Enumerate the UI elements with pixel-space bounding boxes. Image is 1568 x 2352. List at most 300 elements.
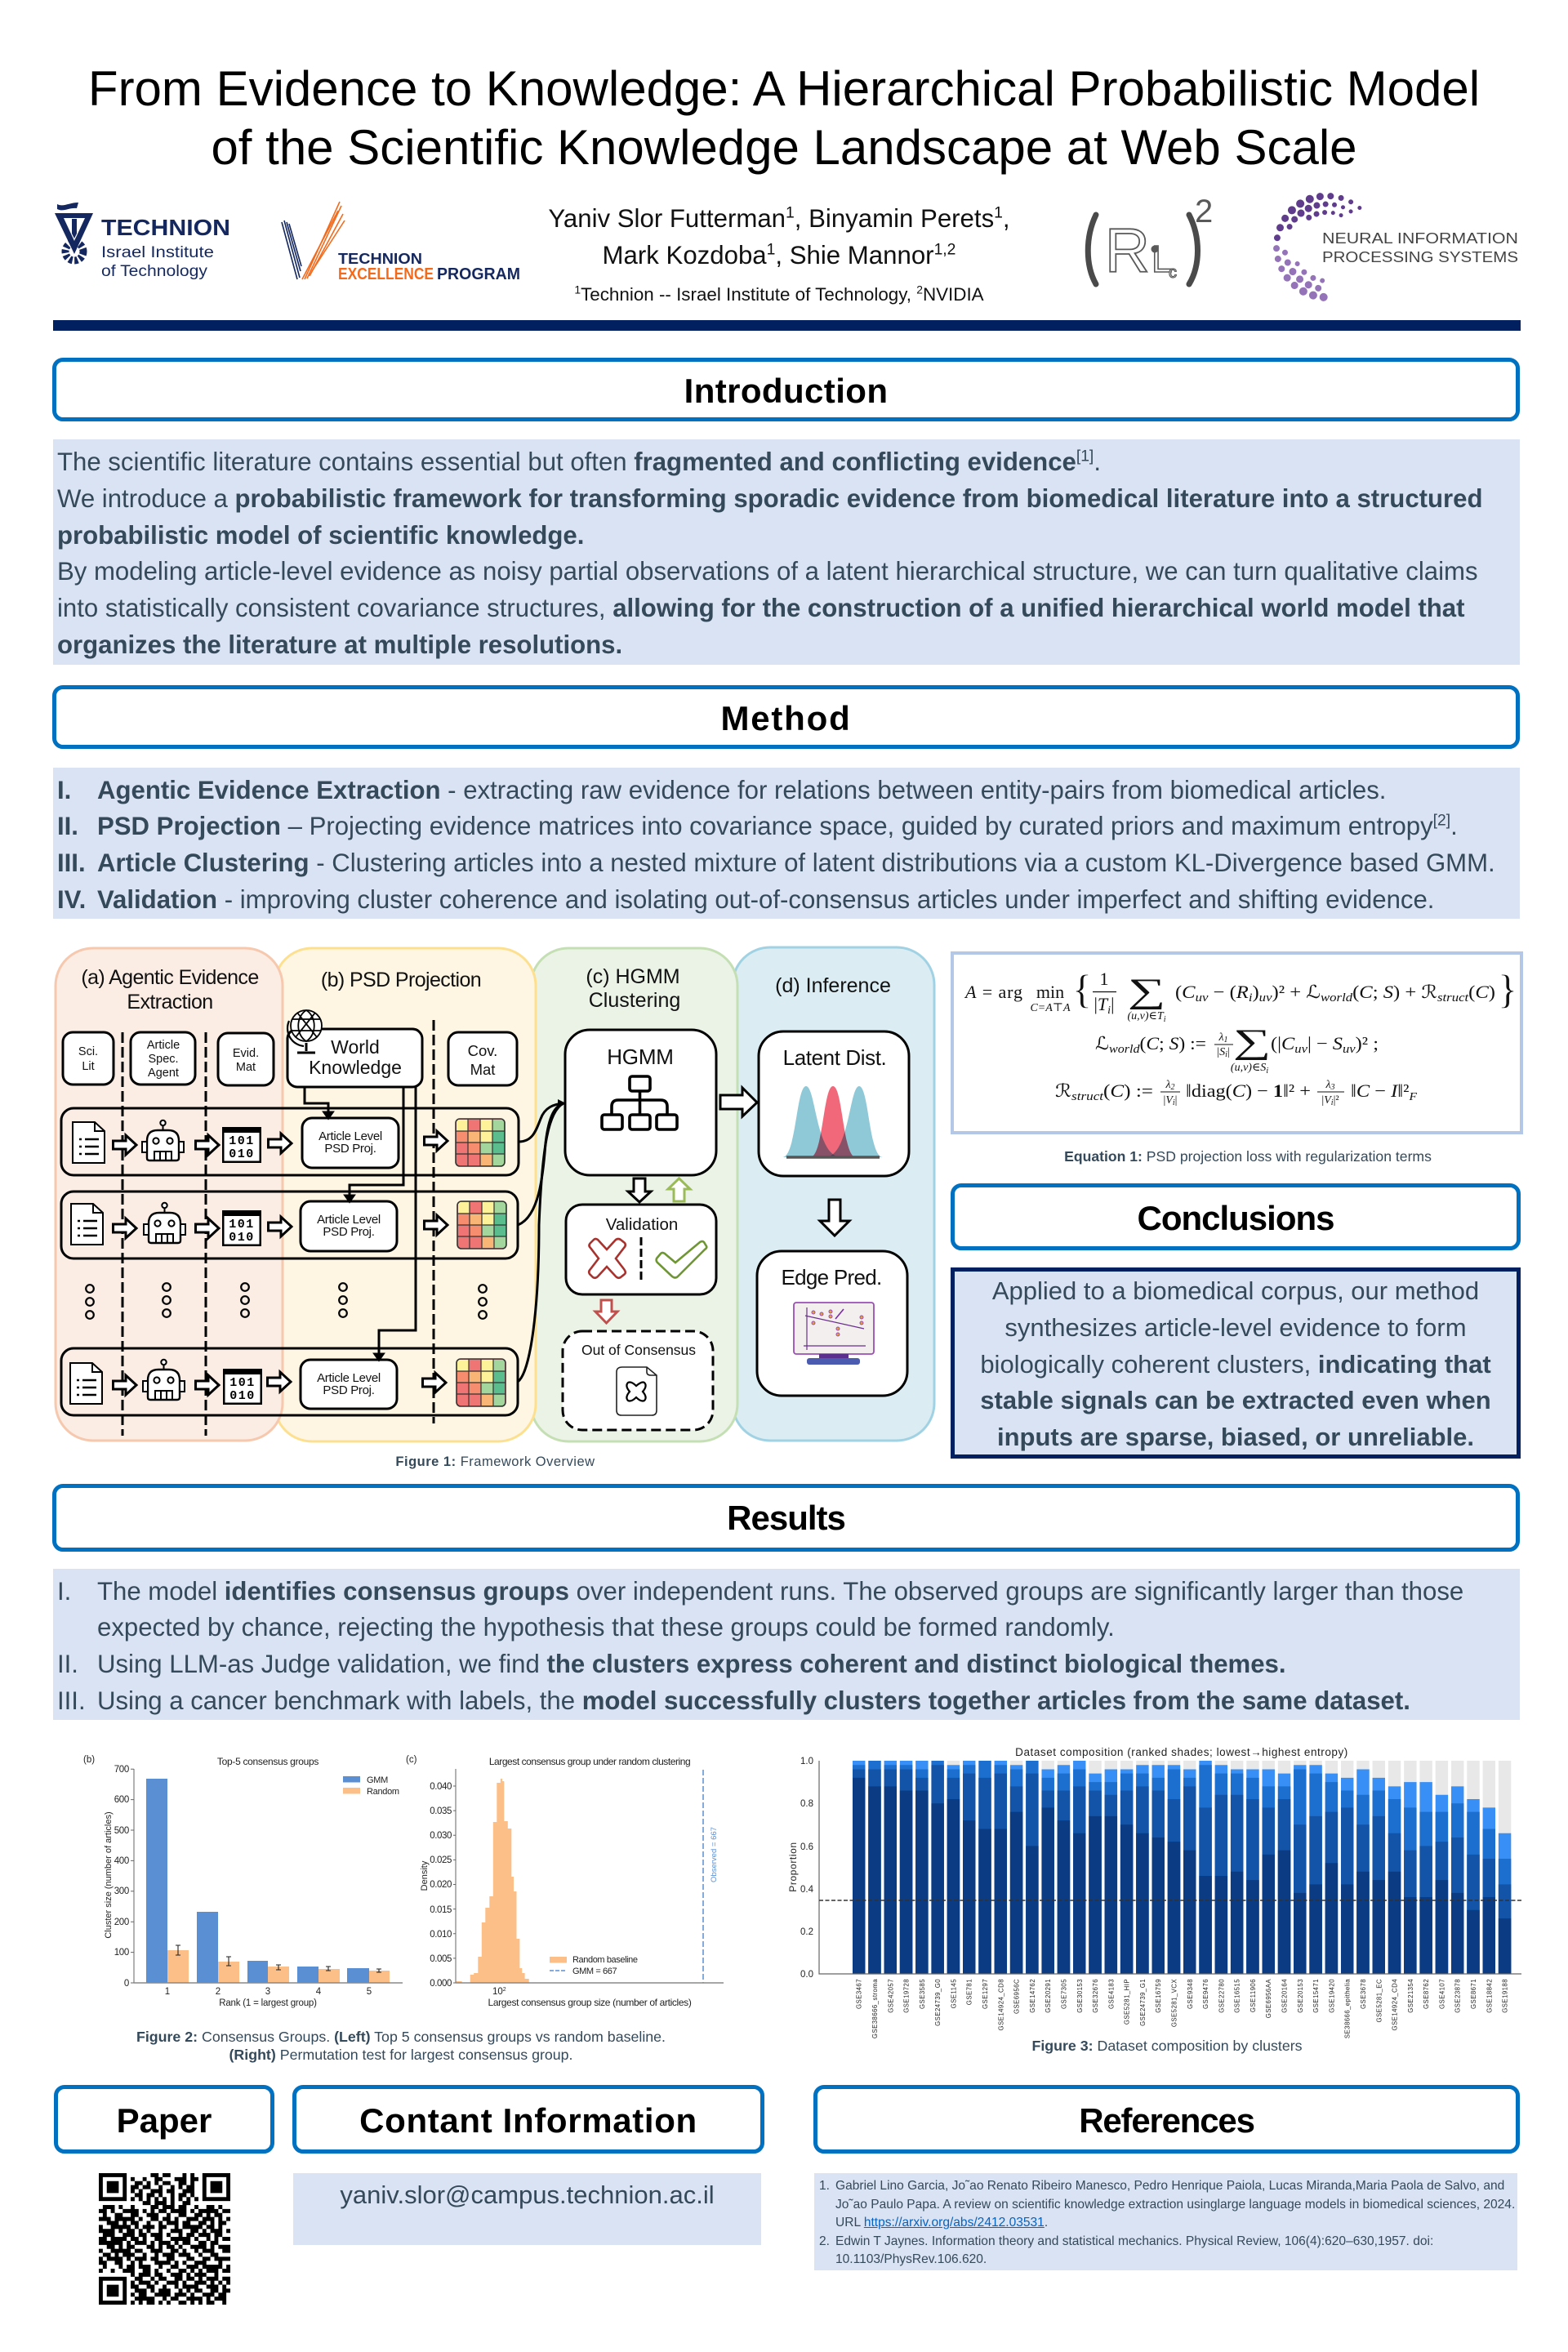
panel: method steps: Validation - improving cluster coherence and isolating out-of-consensus articles under imperfect and shifting evidence. [97,885,1434,914]
chart: dataset composition stacked bars: GSE7305 [1060,1979,1068,2009]
row 3: article pipeline [61,1348,518,1415]
equation line 1: (C [1175,982,1194,1002]
equation line 1: } [1498,966,1517,1012]
chart: dataset composition stacked bars: GSE20153 [1297,1979,1304,2013]
arrows: covariance matrices to HGMM [518,1099,566,1382]
chart: dataset composition stacked bars: GSE3467 [856,1979,863,2009]
chart: top-5 consensus groups bar chart: 5 [367,1987,372,1997]
box: Sci. Lit: Sci. [78,1045,98,1058]
chart: top-5 consensus groups bar chart: 1 [165,1987,170,1997]
panel: method steps: Agentic Evidence Extraction - extracting raw evidence for relations between entity-pairs from biomedical articles. [97,776,1386,804]
chart: largest consensus group histogram: 0.005 [430,1954,452,1964]
equation line 1: − ( [1208,982,1236,1002]
equation line 1: ( [1468,982,1475,1002]
authors: Yaniv Slor Futterman1, Binyamin Perets1, [548,204,1010,233]
caption: equation 1: Equation 1: PSD projection loss with regularization terms [1064,1148,1432,1165]
figure 1: framework overview diagram [54,946,936,1442]
box: out of consensus: Out of Consensus [581,1342,696,1358]
chart: dataset composition stacked bars: GSE30153 [1076,1979,1084,2013]
heading: panel a: (a) Agentic Evidence [81,966,259,989]
logo: RLC squared lab: L [1152,238,1173,280]
arrow: validation to out of consensus [595,1300,617,1323]
equation line 3: i [1331,1098,1334,1107]
chart: largest consensus group histogram: 0.040 [430,1782,452,1792]
title [88,61,1480,175]
panel: contact email: yaniv.slor@campus.technion.ac.il [340,2180,715,2209]
caption: figure 2 [136,2029,666,2063]
equation line 1: struct [1437,991,1469,1004]
arrow: HGMM to latent distribution [720,1088,757,1116]
panel: method steps: PSD Projection – Projecting evidence matrices into covariance space, guided by curated priors and maximum entropy[2]. [97,812,1458,840]
equation line 2: ∑ [1233,1022,1271,1060]
chart: dataset composition stacked bars: GSE19188 [1502,1979,1509,2013]
equation line 1: { [1072,966,1092,1012]
heading: Results: Results [727,1498,845,1537]
box: World Knowledge [287,1029,422,1087]
chart: largest consensus group histogram: 0.000 [430,1979,452,1989]
equation line 2: |S [1217,1046,1225,1058]
box: Cov. Mat: Cov. [468,1042,497,1059]
equation line 1: i [1164,1015,1166,1024]
logo: Neural Information Processing Systems: PROCESSING SYSTEMS [1322,248,1518,265]
chart: dataset composition stacked bars: GSE6956AA [1265,1979,1272,2018]
affiliations: 1Technion -- Israel Institute of Technology, 2NVIDIA [574,283,984,305]
logo: RLC squared lab: R [1105,216,1150,286]
panel: results text: expected by chance, rejecting the hypothesis that these groups could be formed randomly. [97,1613,1115,1642]
heading: References [813,2085,1520,2154]
chart: dataset composition stacked bars: GSE14762 [1029,1979,1036,2013]
chart: dataset composition stacked bars: GSE19728 [903,1979,911,2013]
heading: panel d: (d) Inference [775,974,891,997]
equation line 3: 2 [1171,1083,1175,1092]
chart: dataset composition stacked bars: GSE4107 [1438,1979,1446,2009]
equation line 1: A = arg [964,982,1022,1002]
equation line 1: (u,v)∈T [1128,1010,1164,1022]
chart: top-5 consensus groups bar chart: Cluster size (number of articles) [104,1811,114,1939]
panel: (a) agentic evidence extraction background [56,948,283,1441]
heading: Conclusions: Conclusions [1137,1199,1334,1236]
logo: Technion: of Technology [101,263,208,280]
box: Evid. Mat [218,1033,274,1085]
equation line 1: i [1107,1004,1111,1017]
chart: largest consensus group histogram: Random baseline [572,1955,638,1965]
equation line 2 [1095,1022,1379,1076]
panel: (c) HGMM clustering background [531,948,737,1441]
logo: RLC squared lab: c [1169,264,1177,282]
chart: top-5 consensus groups bar chart: (b) [83,1755,95,1765]
row 1: article pipeline: 101 [229,1134,255,1148]
equation line 3: i [1173,1098,1175,1107]
equation line 3: ( [1103,1080,1110,1101]
chart: top-5 consensus groups bar chart: Random [367,1787,399,1797]
heading: Introduction: Introduction [684,371,888,410]
panel: results text: The model identifies consensus groups over independent runs. The observed groups are significantly larger than those [97,1576,1463,1606]
equation line 3: C) := [1110,1080,1150,1101]
equation line 3: |V [1164,1094,1173,1107]
row 3: article pipeline: 101 [229,1376,256,1390]
logo: RLC squared lab: 2 [1195,194,1213,229]
logo: Technion: Israel Institute [101,244,214,261]
chart: largest consensus group histogram: (c) [406,1755,417,1765]
heading: Conclusions [951,1183,1521,1250]
panel: references list: Gabriel Lino Garcia, Jo˜ao Renato Ribeiro Manesco, Pedro Henrique Paiola, Lucas Miranda,Maria Paola de Salvo, and [835,2179,1504,2193]
equation line 1: uv [1259,991,1272,1004]
chart: dataset composition stacked bars [787,1746,1521,2039]
chart: largest consensus group histogram: 10 [492,1987,503,1997]
chart: dataset composition stacked bars: GSE24739_G0 [934,1979,942,2026]
panel: results text: III. [57,1686,86,1715]
equation line 2: i [1266,1067,1268,1076]
logo: Technion Excellence Program: EXCELLENCE [338,265,434,283]
equation line 2: i [1225,1050,1227,1059]
panel: introduction text: We introduce a probabilistic framework for transforming sporadic evidence from biomedical literature into a structured [57,484,1483,513]
equation line 1: C=A⊤A [1030,1002,1071,1014]
equation line 1: R [1236,982,1249,1002]
chart: top-5 consensus groups bar chart: 4 [316,1987,322,1997]
heading: panel b: (b) PSD Projection [321,969,481,991]
chart: largest consensus group histogram: 0.020 [430,1880,452,1890]
equation line 3: |² [1334,1094,1339,1107]
equation line 3: λ [1165,1079,1171,1091]
chart: dataset composition stacked bars: GSE3678 [1360,1979,1367,2009]
heading: Method: Method [720,699,852,737]
equation line 3: 3 [1330,1083,1335,1092]
panel: conclusions text: stable signals can be extracted even when [980,1386,1491,1414]
panel: method steps: III. [57,849,86,877]
dashed column dividers [122,1020,434,1436]
equation line 2: C; S) := [1146,1033,1205,1054]
chart: dataset composition stacked bars: 0.2 [800,1927,813,1937]
chart: top-5 consensus groups bar chart: 200 [114,1918,129,1927]
chart: dataset composition stacked bars: GSE16759 [1155,1979,1162,2013]
equation line 1 [964,966,1517,1024]
row 2: article pipeline: 101 [229,1218,255,1232]
equation line 1: 1 [1099,969,1109,989]
panel: references list: Edwin T Jaynes. Information theory and statistical mechanics. Physical Review, 106(4):620–630,1957. doi: [835,2234,1433,2247]
heading: Paper: Paper [117,2100,212,2140]
panel: references list: 1. [819,2179,830,2193]
equation line 3: ℛ [1055,1080,1070,1101]
equation line 2: | [1227,1046,1230,1058]
chart: top-5 consensus groups bar chart [83,1755,403,2008]
chart: dataset composition stacked bars: GSE22780 [1218,1979,1225,2013]
heading: References: References [1079,2100,1254,2140]
icon: QR code [99,2173,230,2305]
arrows: world knowledge to article level projections [305,1087,416,1360]
box: HGMM with hierarchy icon: HGMM [607,1045,674,1069]
chart: top-5 consensus groups bar chart: 2 [216,1987,220,1997]
chart: dataset composition stacked bars: GSE9348 [1187,1979,1194,2009]
panel: references list: URL https://arxiv.org/abs/2412.03531. [835,2216,1048,2230]
chart: largest consensus group histogram: Largest consensus group size (number of articles) [488,1997,692,2008]
logo: Technion [55,203,230,280]
heading: Paper [54,2085,274,2154]
panel: introduction text: into statistically consistent covariance structures, allowing for the construction of a unified hierarchical world model that [57,594,1465,622]
box: out of consensus [563,1331,713,1430]
chart: top-5 consensus groups bar chart: 500 [114,1826,129,1836]
chart: dataset composition stacked bars: GSE5281_HIP [1124,1979,1131,2025]
chart: largest consensus group histogram: Observed = 667 [710,1827,719,1882]
panel: conclusions text: inputs are sparse, biased, or unreliable. [997,1423,1474,1451]
box: edge prediction with monitor icon [757,1251,907,1396]
chart: largest consensus group histogram: 0.025 [430,1855,452,1865]
chart: dataset composition stacked bars: GSE4183 [1107,1979,1115,2009]
equation line 2: (|C [1271,1033,1294,1054]
panel: conclusions text [951,1267,1521,1459]
title: From Evidence to Knowledge: A Hierarchical Probabilistic Model [88,61,1480,116]
chart: top-5 consensus groups bar chart: 100 [114,1948,129,1958]
panel: method steps: I. [57,776,71,804]
chart: top-5 consensus groups bar chart: 300 [114,1886,129,1896]
heading: panel c: (c) HGMM [586,965,680,988]
logo: Technion Excellence Program: PROGRAM [437,265,520,283]
chart: largest consensus group histogram: 0.015 [430,1905,452,1915]
panel: results text: Using LLM-as Judge validation, we find the clusters express coherent and distinct biological themes. [97,1650,1286,1678]
chart: top-5 consensus groups bar chart: 600 [114,1795,129,1805]
row 3: article pipeline: Article Level [317,1371,381,1385]
chart: dataset composition stacked bars: GSE11906 [1250,1979,1257,2012]
panel: results text: II. [57,1650,78,1678]
panel: (b) PSD projection background [274,948,536,1441]
box: Article Spec. Agent [131,1032,195,1085]
arrow: latent distribution to edge prediction [820,1200,849,1236]
equation line 3: F [1408,1091,1417,1103]
box: Evid. Mat: Mat [236,1061,256,1074]
equation line 3: | [1175,1094,1177,1107]
equation line 1: C; S) + ℛ [1359,982,1432,1002]
chart: dataset composition stacked bars: GSE5281_VCX [1171,1979,1178,2027]
chart: dataset composition stacked bars: 0.4 [800,1885,814,1895]
chart: dataset composition stacked bars: GSE19420 [1328,1979,1335,2013]
chart: dataset composition stacked bars: GSE1297 [982,1979,989,2009]
equation line 1: world [1321,991,1353,1004]
chart: dataset composition stacked bars: GSE781 [966,1979,973,2005]
equation line 1: i [1249,991,1253,1004]
equation line 2: world [1109,1043,1140,1056]
equation line 2: ( [1140,1033,1146,1054]
logo: Technion: TECHNION [101,215,230,240]
chart: top-5 consensus groups bar chart: 0 [124,1979,129,1989]
chart: dataset composition stacked bars: 0.6 [800,1842,813,1852]
row 1: article pipeline: 010 [229,1147,255,1161]
panel: references list [814,2173,1517,2270]
row 2: article pipeline: PSD Proj. [323,1225,375,1239]
chart: dataset composition stacked bars: GSE42057 [887,1979,894,2013]
chart: largest consensus group histogram: GMM = 667 [572,1967,617,1976]
logo: Technion Excellence Program [281,201,520,283]
logo: Neural Information Processing Systems [1273,193,1518,301]
figure 1: framework overview diagram: Clustering [589,989,680,1012]
caption: figure 1: Figure 1: Framework Overview [395,1454,595,1469]
chart: dataset composition stacked bars: GSE20291 [1045,1979,1052,2013]
row 2: article pipeline [61,1192,518,1258]
equation line 3: λ [1325,1079,1331,1091]
chart: top-5 consensus groups bar chart: GMM [367,1775,388,1785]
chart: largest consensus group histogram [406,1755,724,2008]
chart: dataset composition stacked bars: GSE20164 [1281,1979,1289,2013]
row 1: article pipeline [61,1108,519,1175]
panel: conclusions text: synthesizes article-level evidence to form [1004,1313,1467,1342]
panel: references list: 2. [819,2234,830,2247]
chart: dataset composition stacked bars: GSE38666_stroma [871,1979,879,2038]
chart: dataset composition stacked bars: GSE1145 [950,1979,957,2008]
heading: Contact Information [292,2085,764,2154]
chart: dataset composition stacked bars: 0.8 [800,1799,813,1809]
chart: top-5 consensus groups bar chart: Rank (1 = largest group) [219,1998,317,2008]
chart: dataset composition stacked bars: GSE6956C [1013,1979,1021,2014]
caption: figure 2: (Right) Permutation test for largest consensus group. [229,2047,573,2063]
panel: method steps [53,768,1520,919]
panel: conclusions text: biologically coherent clusters, indicating that [980,1350,1491,1379]
chart: dataset composition stacked bars: 1.0 [800,1757,813,1766]
box: Sci. Lit [63,1032,114,1085]
chart: largest consensus group histogram: Density [420,1860,430,1891]
panel: results text: Using a cancer benchmark with labels, the model successfully clusters together articles from the same dataset. [97,1686,1410,1715]
chart: dataset composition stacked bars: GSE14924_CD8 [997,1979,1004,2030]
equation line 2: (u,v)∈S [1231,1062,1266,1074]
panel: results text: I. [57,1576,71,1606]
heading: Contact Information: Contant Information [359,2100,697,2140]
equation line 2: 1 [1224,1036,1228,1045]
equation line 3: ‖C − I‖² [1351,1080,1408,1101]
equation line 1: |T [1094,994,1107,1014]
equation line 2: ℒ [1095,1033,1108,1054]
panel: contact email [293,2173,761,2245]
logo: Neural Information Processing Systems: NEURAL INFORMATION [1322,229,1518,247]
panel: introduction text: By modeling article-level evidence as noisy partial observations of a latent hierarchical structure, we can turn qualitative claims [57,557,1478,586]
authors [548,204,1010,270]
logo: Technion Excellence Program: TECHNION [338,251,422,267]
equation line 1: | [1111,994,1114,1014]
panel: references list: 10.1103/PhysRev.106.620. [835,2252,987,2266]
chart: dataset composition stacked bars: GSE18842 [1486,1979,1493,2013]
ellipsis dots between rows [86,1283,487,1319]
chart: dataset composition stacked bars: GSE23878 [1454,1979,1462,2013]
equation line 1: ) [1253,982,1259,1002]
box: validation [566,1205,716,1294]
panel: conclusions text: Applied to a biomedical corpus, our method [992,1276,1479,1305]
chart: dataset composition stacked bars: GSE9476 [1202,1979,1209,2009]
box: edge prediction with monitor icon: Edge Pred. [781,1265,882,1290]
panel: results text [53,1569,1520,1720]
equation line 1: min [1036,982,1064,1002]
header divider bar [53,320,1521,331]
chart: top-5 consensus groups bar chart: 700 [114,1765,129,1775]
panel: (d) inference background [733,947,934,1441]
panel: introduction text: organizes the literature at multiple resolutions. [57,630,622,659]
equation line 1: uv [1196,991,1209,1004]
title: of the Scientific Knowledge Landscape at Web Scale [211,120,1357,175]
row 3: article pipeline: PSD Proj. [323,1383,375,1397]
panel: references list: Jo˜ao Paulo Papa. A review on scientific knowledge extraction usinglarge language models in biomedical sciences, 2024. [835,2197,1515,2212]
equation line 2: uv [1343,1043,1356,1056]
figure 1: framework overview diagram: Extraction [127,991,213,1013]
chart: dataset composition stacked bars: GSE24739_G1 [1139,1979,1147,2026]
box: Article Spec. Agent: Article [147,1039,180,1052]
chart: largest consensus group histogram: 0.030 [430,1831,452,1841]
heading: Introduction [52,358,1520,421]
row 1: article pipeline: Article Level [318,1129,382,1143]
row 2: article pipeline: Article Level [317,1213,381,1227]
authors: Mark Kozdoba1, Shie Mannor1,2 [603,241,956,270]
chart: dataset composition stacked bars: GSE21354 [1407,1979,1414,2013]
equation line 3: struct [1071,1090,1104,1103]
equation line 3 [1055,1079,1417,1107]
chart: dataset composition stacked bars: GSE32676 [1092,1979,1099,2013]
panel: equation 1 [951,951,1523,1134]
chart: dataset composition stacked bars: GSE14924_CD4 [1392,1979,1399,2030]
chart: dataset composition stacked bars: 0.0 [800,1970,813,1980]
panel: method steps: Article Clustering - Clustering articles into a nested mixture of latent distributions via a custom KL-Divergence based GMM. [97,849,1495,877]
equation line 1: )² + ℒ [1272,982,1321,1002]
icon: globe [287,1010,322,1053]
equation line 3: ‖diag(C) − 1‖² + [1186,1080,1311,1101]
row 1: article pipeline: PSD Proj. [324,1142,376,1156]
chart: largest consensus group histogram: 2 [503,1987,506,1993]
chart: dataset composition stacked bars: GSE16515 [1234,1979,1241,2013]
chart: largest consensus group histogram: 0.035 [430,1806,452,1816]
box: Article Spec. Agent: Agent [148,1067,179,1080]
box: validation: Validation [606,1215,678,1234]
chart: top-5 consensus groups bar chart: 400 [114,1856,129,1866]
chart: dataset composition stacked bars: Proportion [787,1842,799,1892]
box: Cov. Mat [448,1032,517,1085]
equation line 2: uv [1294,1043,1307,1056]
box: World Knowledge: World [331,1036,380,1058]
panel: introduction text: probabilistic model of scientific knowledge. [57,521,584,550]
chart: dataset composition stacked bars: GSE5281_EC [1375,1979,1383,2022]
equation line 1: C) [1475,982,1494,1002]
chart: dataset composition stacked bars: GSE15471 [1312,1979,1320,2013]
equation line 2: )² ; [1356,1033,1379,1054]
equation line 2: S [1333,1033,1343,1054]
chart: largest consensus group histogram: 0.010 [430,1930,452,1940]
caption: figure 2: Figure 2: Consensus Groups. (Left) Top 5 consensus groups vs random baseline. [136,2029,666,2045]
caption: figure 3: Figure 3: Dataset composition by clusters [1031,2038,1303,2054]
row 3: article pipeline: 010 [229,1389,256,1403]
box: latent distribution: Latent Dist. [783,1045,886,1070]
panel: method steps: IV. [57,885,86,914]
arrow: HGMM to validation [628,1178,651,1202]
box: latent distribution [759,1031,909,1176]
equation line 2: λ [1218,1031,1224,1044]
box: HGMM with hierarchy icon [565,1030,716,1175]
box: World Knowledge: Knowledge [309,1057,402,1078]
equation line 3: |V [1321,1094,1331,1107]
chart: top-5 consensus groups bar chart: 3 [265,1987,270,1997]
heading: Results [52,1484,1520,1552]
heading: Method [52,685,1520,749]
chart: dataset composition stacked bars: Dataset composition (ranked shades; lowest→highest entropy) [1015,1746,1348,1758]
equation line 1: ( [1352,982,1359,1002]
logo: RLC squared lab [1085,194,1213,287]
box: Article Spec. Agent: Spec. [148,1053,179,1066]
chart: top-5 consensus groups bar chart: Top-5 consensus groups [217,1756,318,1767]
panel: introduction text [53,439,1520,665]
box: Evid. Mat: Evid. [233,1047,259,1060]
chart: dataset composition stacked bars: GSE3585 [919,1979,926,2009]
panel: method steps: II. [57,812,78,840]
panel: introduction text: The scientific literature contains essential but often fragmented and conflicting evidence[1]. [57,448,1101,476]
chart: dataset composition stacked bars: GSE8762 [1423,1979,1430,2009]
equation line 2: | − [1307,1033,1333,1054]
arrow: validation feedback to HGMM [668,1178,690,1201]
chart: dataset composition stacked bars: GSE8671 [1470,1979,1477,2009]
row 2: article pipeline: 010 [229,1231,255,1245]
box: Sci. Lit: Lit [82,1060,95,1073]
chart: largest consensus group histogram: Largest consensus group under random clustering [489,1756,690,1767]
equation line 1: ∑ [1128,971,1165,1009]
